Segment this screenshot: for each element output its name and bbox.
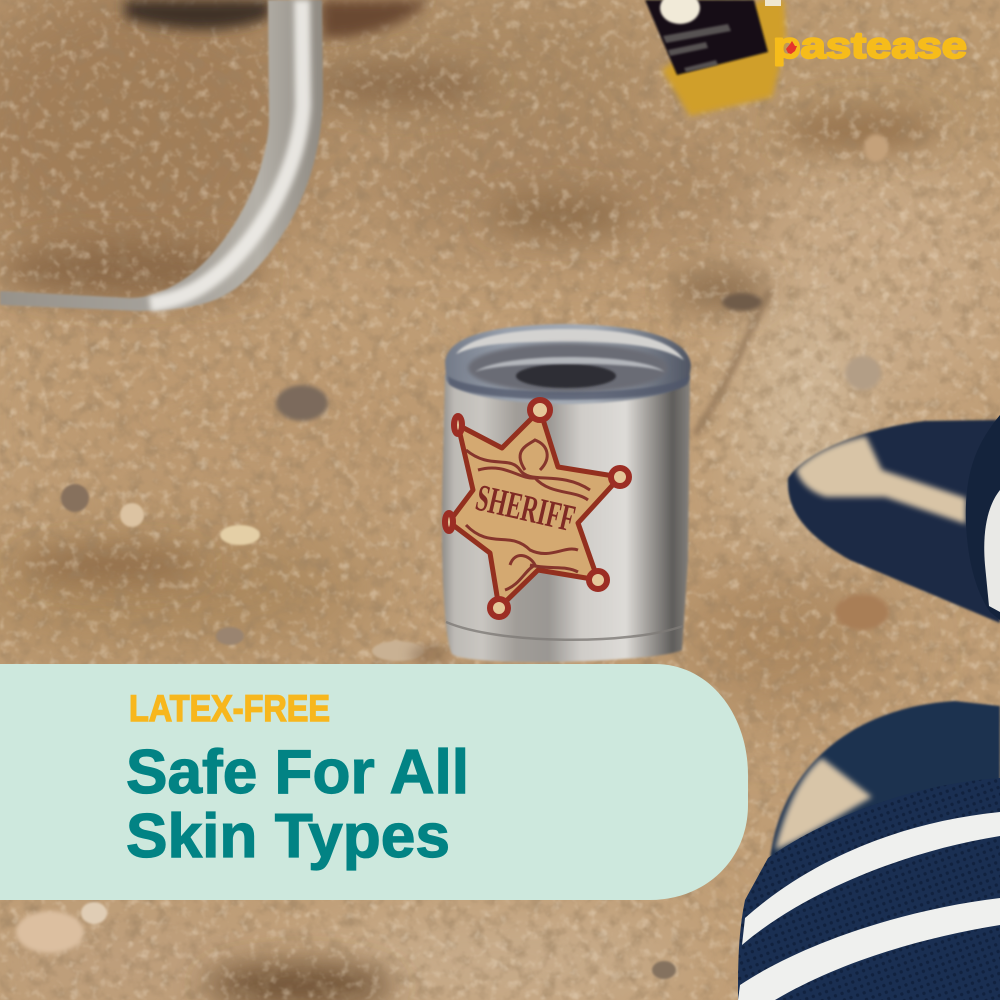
tumbler base ring [446,622,683,640]
badge word: SHERIFF: SHERIFF [472,477,579,540]
tumbler lid [445,324,691,404]
heading line 1: Safe For All [126,738,469,807]
heading line 2: Skin Types [126,802,450,871]
bottle at top [645,0,786,116]
kicker: LATEX-FREE: LATEX-FREE [129,688,330,729]
lower right sandal [738,701,1000,1000]
brand logo: pastease: pastease [773,25,967,66]
sheriff star badge [445,400,629,617]
mint text panel [0,664,748,900]
sand crease near tumbler [695,290,770,435]
chair leg and dark object at top [0,0,430,311]
tumbler body [442,375,690,662]
rocks in the sand [16,134,889,979]
upper right sandal [788,415,1000,623]
steel tumbler [410,324,691,665]
icon: red maple leaf [786,41,797,54]
